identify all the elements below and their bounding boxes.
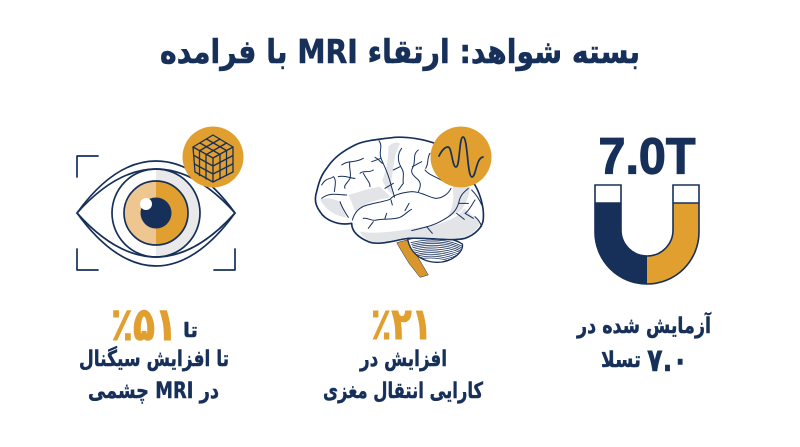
brain folds (322, 141, 482, 233)
stat: eye percentage: تا (183, 318, 198, 342)
text: brain caption: افزایش در (359, 347, 447, 372)
gold half (647, 203, 699, 284)
magnet outline and caps (595, 185, 699, 284)
cerebrum (315, 137, 483, 243)
title: بسته شواهد: ارتقاء MRI با فرامده (160, 32, 640, 72)
icon: wave badge (430, 126, 492, 188)
icon: eye with scan frame (77, 156, 235, 270)
text: brain caption (323, 347, 483, 404)
text: eye caption: در MRI چشمی (88, 379, 219, 404)
text: magnet caption (576, 311, 711, 379)
magnet label 7.0T: 7.0T (598, 128, 696, 184)
text: magnet caption: تسلا (601, 348, 641, 373)
cerebellum (408, 237, 463, 262)
brain shading (320, 142, 480, 242)
text: magnet caption: ۷.۰ (647, 341, 688, 379)
text: eye caption (79, 345, 229, 404)
text: brain caption: کارایی انتقال مغزی (323, 379, 483, 404)
text: eye caption: تا افزایش سیگنال (79, 345, 229, 372)
brain stem (397, 240, 428, 277)
icon: cube badge (182, 126, 244, 188)
text: magnet caption: آزمایش شده در (576, 311, 711, 339)
stat: eye percentage: ٪۵۱ (111, 297, 177, 351)
icon: brain (315, 137, 483, 277)
stat: brain percentage: ٪۲۱ (371, 299, 432, 350)
icon: magnet (595, 185, 699, 284)
navy half (595, 203, 647, 284)
